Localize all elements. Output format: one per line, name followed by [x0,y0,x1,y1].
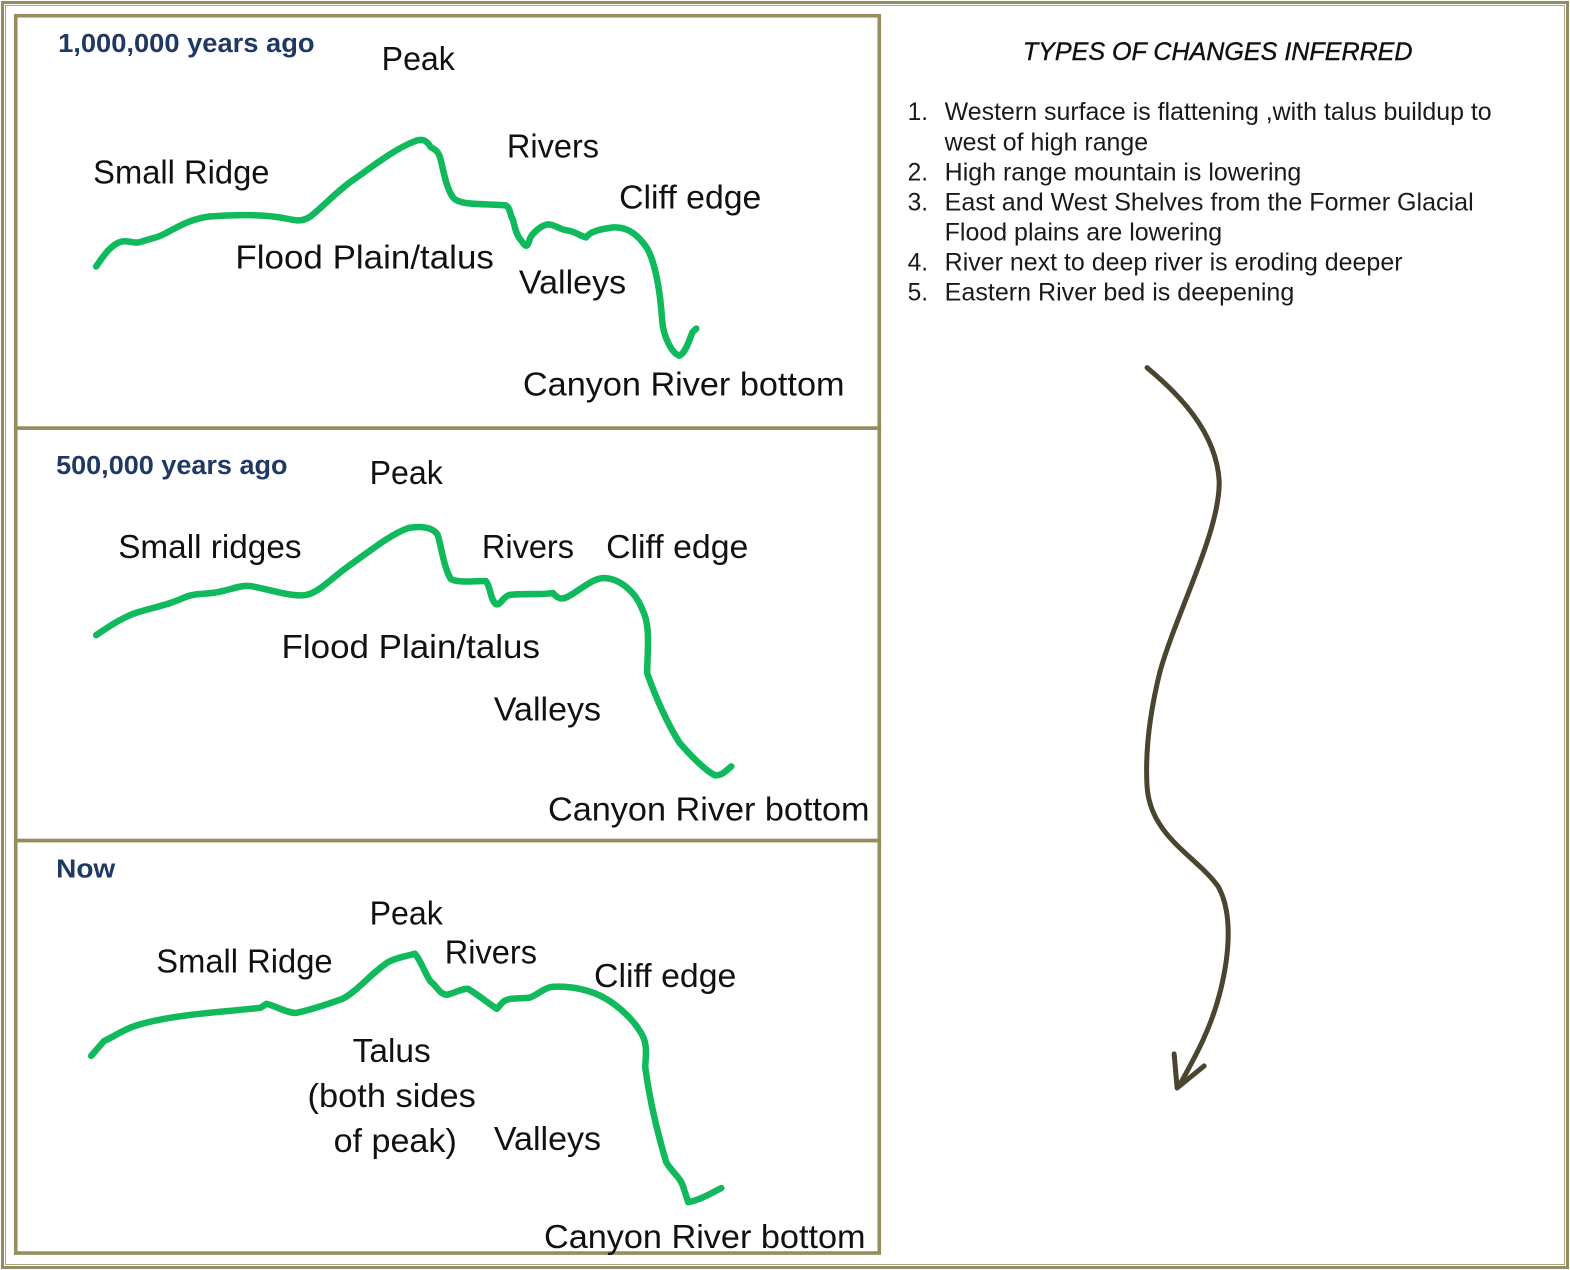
label: Small Ridge: Small Ridge [156,944,333,981]
panel: 500,000 years ago [16,428,879,841]
item 3: East and West Shelves from the Former Glacial [945,189,1474,216]
item 1: Western surface is flattening ,with talus buildup to [945,99,1492,126]
profile curve 1 [96,140,696,356]
label: Rivers: Rivers [482,529,574,566]
panel: types of changes inferred [908,39,1492,307]
item 1: 1. [908,99,928,126]
label: Cliff edge: Cliff edge [619,179,761,216]
heading: types of changes inferred: TYPES OF CHANGES INFERRED [1023,39,1413,66]
item 2: High range mountain is lowering [945,159,1301,186]
label: Rivers: Rivers [507,128,599,165]
item 3 [908,189,1474,246]
label: Talus (both sides of peak): (both sides [308,1078,476,1115]
label: Flood Plain/talus: Flood Plain/talus [235,239,494,276]
item 3: 3. [908,189,928,216]
panel: Now [16,841,879,1256]
label: Small ridges: Small ridges [118,529,302,566]
heading: Now: Now [56,854,116,884]
label: Talus (both sides of peak): Talus [353,1033,431,1070]
label: Valleys: Valleys [519,265,626,302]
label: Canyon River bottom: Canyon River bottom [548,791,870,828]
label: Peak: Peak [382,41,455,78]
heading: 500,000 years ago: 500,000 years ago [56,450,288,480]
label: Flood Plain/talus: Flood Plain/talus [282,629,540,666]
item 3: Flood plains are lowering [945,219,1222,246]
panel: 1,000,000 years ago [16,16,879,428]
item 4: 4. [908,249,928,276]
item 5: 5. [908,280,928,307]
label: Cliff edge: Cliff edge [606,529,748,566]
profile curve 3 [91,954,721,1202]
label: Small Ridge: Small Ridge [93,154,269,191]
item 5: Eastern River bed is deepening [945,280,1294,307]
label: Talus (both sides of peak) [308,1033,476,1160]
label: Canyon River bottom: Canyon River bottom [544,1219,866,1256]
label: Rivers: Rivers [445,935,537,972]
item 4: River next to deep river is eroding deeper [945,249,1403,276]
label: Cliff edge: Cliff edge [594,958,736,995]
label: Valleys: Valleys [494,691,601,728]
label: Canyon River bottom: Canyon River bottom [523,367,845,404]
heading: 1,000,000 years ago: 1,000,000 years ago [58,28,315,58]
label: Peak: Peak [370,455,443,492]
item 1 [908,99,1492,156]
label: Valleys: Valleys [494,1121,601,1158]
profile curve 2 [96,527,731,775]
numbered list [908,99,1492,307]
item 1: west of high range [944,129,1148,156]
item 2: 2. [908,159,928,186]
label: Talus (both sides of peak): of peak) [334,1123,457,1160]
arrow: time direction [1147,368,1228,1088]
label: Peak: Peak [370,896,443,933]
